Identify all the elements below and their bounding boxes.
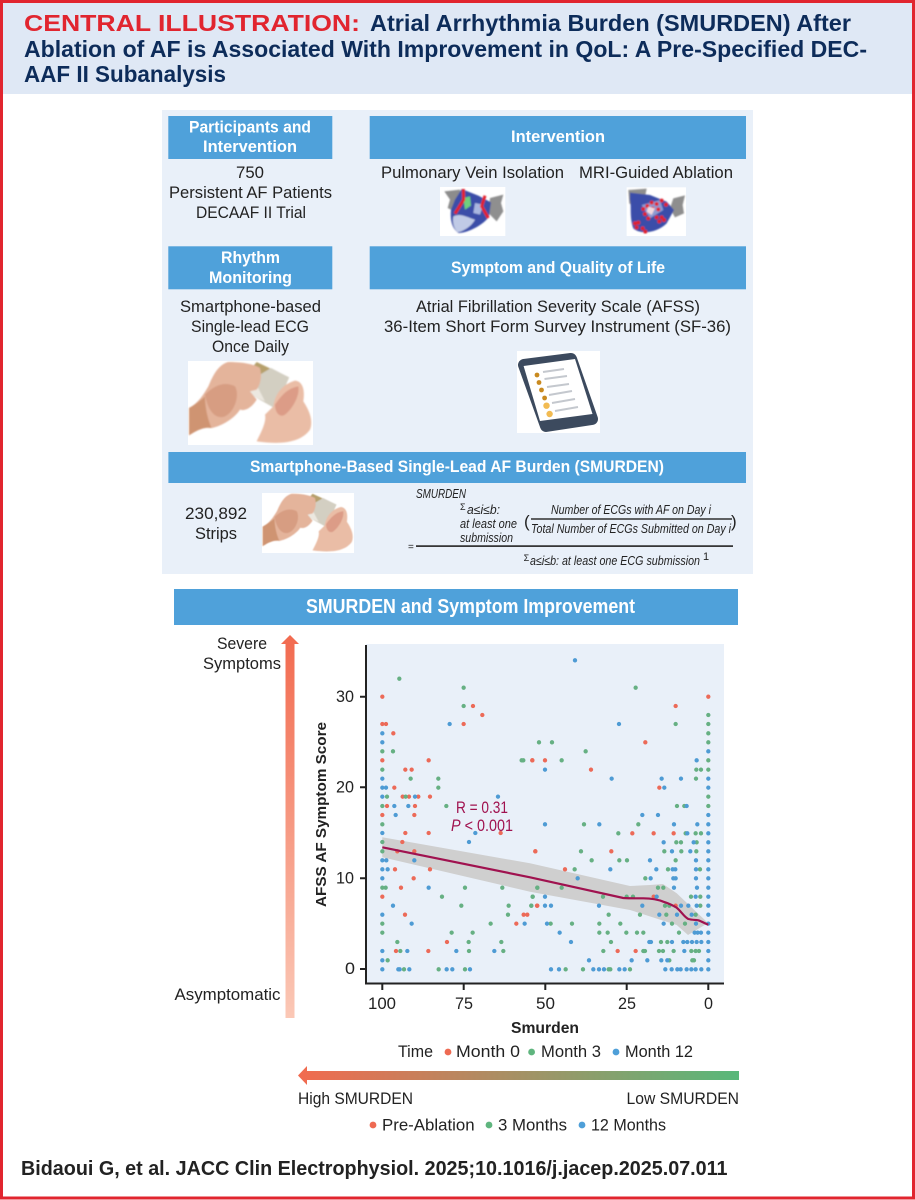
heading: SMURDEN and symptom improvement	[174, 589, 738, 625]
y axis: 0	[345, 959, 355, 978]
formula: submission	[460, 531, 513, 545]
severe symptoms label: Severe	[217, 634, 267, 653]
x axis: 100	[368, 994, 396, 1013]
scatter points: month 0	[382, 697, 708, 951]
regression line	[382, 847, 708, 925]
section: intervention: Intervention	[511, 127, 605, 146]
section: intervention: Pulmonary Vein Isolation	[381, 163, 564, 182]
legend: timepoints: Pre-Ablation	[382, 1116, 475, 1134]
section: symptom and quality of life: Symptom and Quality of Life	[451, 258, 665, 277]
icon: smartphone questionnaire	[517, 351, 600, 433]
section: SMURDEN definition: Smartphone-Based Single-Lead AF Burden (SMURDEN)	[250, 457, 664, 476]
section: rhythm monitoring: Monitoring	[209, 268, 292, 287]
chart legend	[398, 1042, 693, 1061]
scatter points: month 12	[382, 660, 708, 969]
formula: a≤i≤b: at least one ECG submission	[530, 554, 700, 568]
correlation annotation: P < 0.001	[451, 817, 513, 835]
formula	[408, 487, 737, 568]
section: rhythm monitoring	[168, 246, 332, 445]
section: participants and intervention	[168, 116, 332, 222]
formula: =	[408, 542, 414, 553]
x axis: 50	[536, 994, 555, 1013]
formula: SMURDEN	[416, 487, 467, 501]
formula: Σ	[524, 553, 530, 563]
confidence band	[382, 837, 708, 935]
section: participants and intervention: 750	[236, 163, 264, 182]
x axis	[365, 984, 724, 1037]
x axis: 75	[455, 994, 473, 1013]
x axis: Smurden	[511, 1020, 579, 1037]
low SMURDEN label: Low SMURDEN	[626, 1089, 739, 1108]
y axis	[313, 645, 366, 984]
section: rhythm monitoring: Smartphone-based	[180, 297, 321, 316]
chart: SMURDEN vs AFSS scatter plot	[313, 644, 724, 1061]
section: intervention	[370, 116, 746, 236]
section: SMURDEN definition: Strips	[195, 524, 237, 543]
severe symptoms label	[203, 634, 281, 673]
section: symptom and quality of life: Atrial Fibrillation Severity Scale (AFSS)	[416, 297, 700, 316]
icon: heart map with pulmonary vein isolation	[440, 187, 505, 236]
chart legend: Month 12	[625, 1042, 693, 1061]
section: participants and intervention: Persistent AF Patients	[169, 183, 332, 202]
title banner	[3, 3, 912, 94]
correlation annotation	[451, 799, 513, 835]
chart legend: Month 0	[456, 1042, 520, 1061]
x axis: 0	[704, 994, 713, 1013]
panel: study design	[162, 110, 753, 574]
section: intervention: MRI-Guided Ablation	[579, 163, 733, 182]
formula: Σ	[460, 502, 466, 512]
icon: heart map with MRI-guided ablation	[627, 187, 686, 236]
citation: Bidaoui G, et al. JACC Clin Electrophysiol. 2025;10.1016/j.jacep.2025.07.011	[21, 1158, 728, 1180]
y axis: AFSS AF Symptom Score	[313, 722, 330, 907]
y axis: 30	[336, 687, 354, 706]
title line 2: Ablation of AF is Associated With Improvement in QoL: A Pre-Specified DEC-	[24, 36, 867, 62]
section: participants and intervention: DECAAF II Trial	[196, 203, 306, 222]
formula: a≤i≤b:	[467, 503, 500, 517]
section: SMURDEN definition	[168, 452, 746, 568]
legend: timepoints	[370, 1116, 666, 1134]
formula: at least one	[460, 517, 517, 531]
section: SMURDEN definition: 230,892	[185, 504, 247, 523]
asymptomatic label: Asymptomatic	[174, 985, 281, 1004]
y axis: 20	[336, 778, 354, 796]
formula: )	[731, 512, 737, 531]
section: participants and intervention: Intervention	[203, 137, 297, 156]
section: rhythm monitoring: Single-lead ECG	[191, 317, 309, 336]
formula: Number of ECGs with AF on Day i	[551, 503, 712, 517]
chart legend: Month 3	[541, 1042, 601, 1061]
section: symptom and quality of life	[370, 246, 746, 433]
legend: timepoints: 12 Months	[591, 1116, 666, 1134]
x axis: 25	[618, 994, 636, 1013]
y axis: 10	[336, 868, 354, 888]
section: rhythm monitoring: Rhythm	[221, 248, 280, 267]
section: rhythm monitoring: Once Daily	[212, 337, 289, 356]
legend: timepoints: 3 Months	[498, 1116, 567, 1134]
arrow: symptom severity	[174, 634, 299, 1018]
title line 3: AAF II Subanalysis	[24, 61, 226, 87]
title: central illustration label: CENTRAL ILLUSTRATION:	[24, 10, 360, 36]
heading: SMURDEN and symptom improvement: SMURDEN and Symptom Improvement	[306, 596, 635, 618]
formula: 1	[703, 551, 709, 563]
section: participants and intervention: Participants and	[189, 118, 311, 136]
icon: hands holding ECG device	[188, 361, 313, 445]
formula: Total Number of ECGs Submitted on Day i	[531, 522, 732, 536]
chart legend: Time	[398, 1042, 433, 1061]
title line 1: Atrial Arrhythmia Burden (SMURDEN) After	[370, 10, 851, 36]
section: symptom and quality of life: 36-Item Short Form Survey Instrument (SF-36)	[384, 317, 731, 336]
icon: hands holding ECG device small	[262, 493, 354, 553]
arrow: SMURDEN gradient	[298, 1066, 739, 1108]
severe symptoms label: Symptoms	[203, 654, 281, 673]
high SMURDEN label: High SMURDEN	[298, 1089, 413, 1108]
scatter points: month 3	[382, 679, 708, 969]
correlation annotation: R = 0.31	[456, 799, 508, 817]
formula: (	[524, 512, 530, 531]
